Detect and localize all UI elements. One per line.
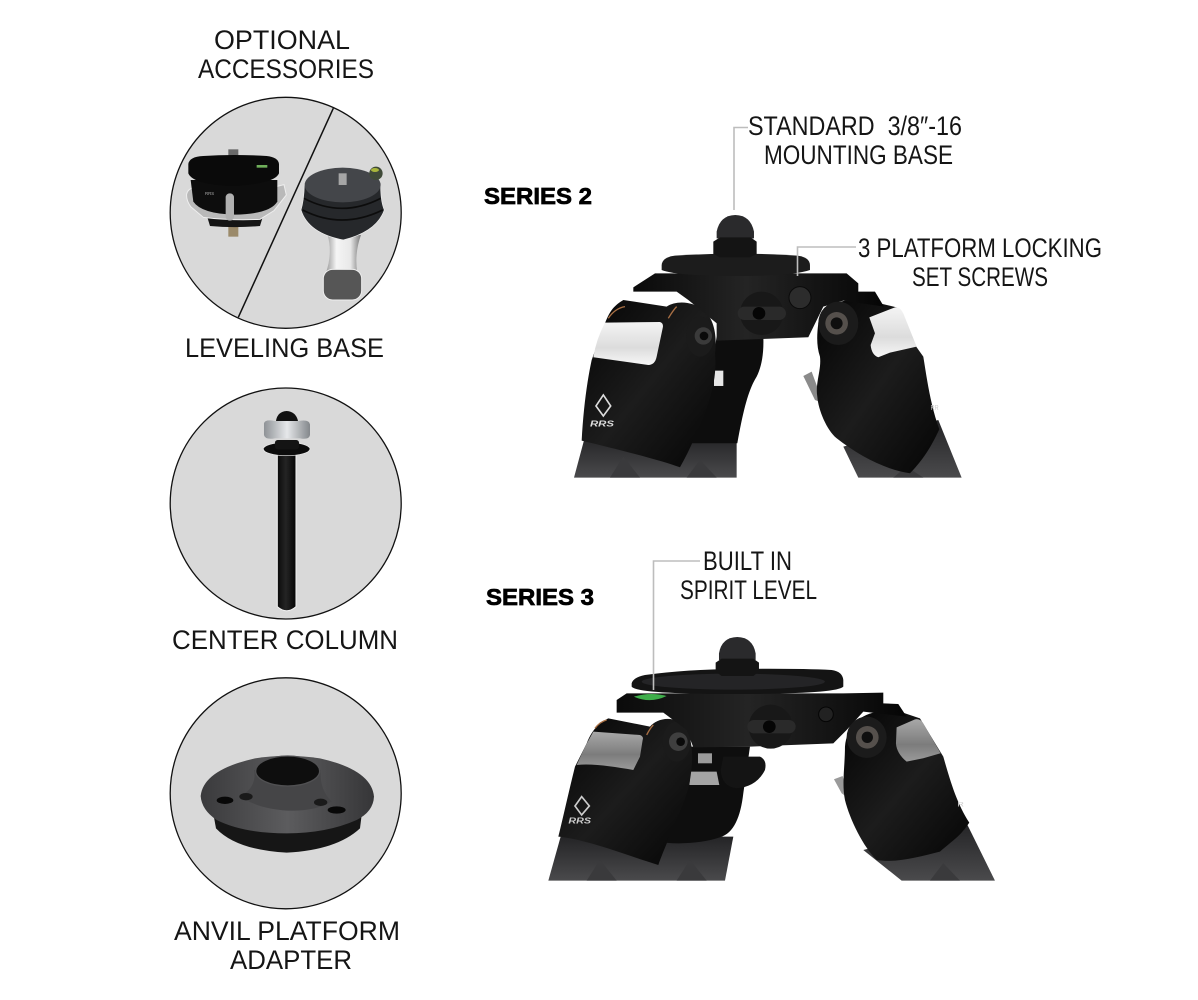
heading: optional accessories: ACCESSORIES [198,54,374,84]
heading: series 2: SERIES 2 [484,183,592,209]
caption: anvil platform adapter: ADAPTER [230,945,352,975]
right RRS logo: R [957,802,964,809]
mounting stud [713,215,757,257]
locking tab [803,372,823,403]
right RRS logo: RR [931,403,939,412]
icon: black leveling base: RRS [205,191,214,196]
platform body [617,693,907,747]
right pivot bolt [847,717,887,758]
callout: spirit level [680,546,817,605]
left pivot bolt [686,317,714,357]
callout: mounting base: STANDARD 3/8″-16 [748,111,962,141]
caption: anvil platform adapter: ANVIL PLATFORM [174,916,400,946]
icon: center column [263,411,310,611]
mounting plate [632,669,843,694]
mounting stud [716,637,759,676]
icon: gray leveling base with knob [301,167,384,300]
icon: black leveling base [187,149,286,237]
leader line: spirit level [654,561,700,690]
platform body [633,273,884,341]
left leg hub [582,300,716,467]
spirit level [634,694,667,700]
heading: series 3: SERIES 3 [486,584,594,610]
left pivot bolt [663,722,691,762]
slot mount [747,705,796,749]
caption: anvil platform adapter [174,916,400,975]
heading: optional accessories [198,25,374,84]
callout: spirit level: SPIRIT LEVEL [680,575,817,605]
callout: locking set screws: SET SCREWS [912,262,1048,292]
carbon legs [548,823,995,881]
callout: mounting base [748,111,962,170]
set screw [789,287,811,309]
left RRS logo [590,395,615,429]
caption: leveling base: LEVELING BASE [185,333,384,363]
left leg hub [558,718,692,865]
callout: locking set screws: 3 PLATFORM LOCKING [858,233,1102,263]
carbon legs [574,420,962,478]
callout: mounting base: MOUNTING BASE [764,140,953,170]
center column and clamp [657,747,766,843]
left RRS logo [568,797,592,825]
callout: locking set screws [858,233,1102,292]
leader line: locking set screws [798,247,856,276]
panel: center column circle [170,388,401,619]
set screw [819,707,833,722]
right leg hub [843,712,969,861]
callout: spirit level: BUILT IN [703,546,792,576]
copper edge [608,307,677,318]
copper edge [595,720,653,735]
right leg hub [817,300,939,473]
center column [680,337,763,443]
right silver pad [896,719,941,762]
panel: leveling base circle [170,97,401,328]
diagram: series 2 tripod head [574,215,962,478]
heading: optional accessories: OPTIONAL [214,25,350,55]
slot mount [738,292,786,335]
locking tab [834,776,848,798]
diagram: series 3 tripod head [548,637,995,881]
divider line [238,108,333,317]
mounting plate [662,254,810,276]
left RRS logo: RRS [568,816,592,825]
panel: anvil platform adapter circle [170,678,401,909]
icon: anvil platform adapter [201,756,374,853]
left silver pad [577,732,643,770]
right pivot bolt [818,302,858,345]
right silver pad [869,307,917,357]
left silver pad [593,322,663,365]
left RRS logo: RRS [590,419,615,429]
leader line: mounting base [734,128,748,210]
caption: center column: CENTER COLUMN [172,625,398,655]
